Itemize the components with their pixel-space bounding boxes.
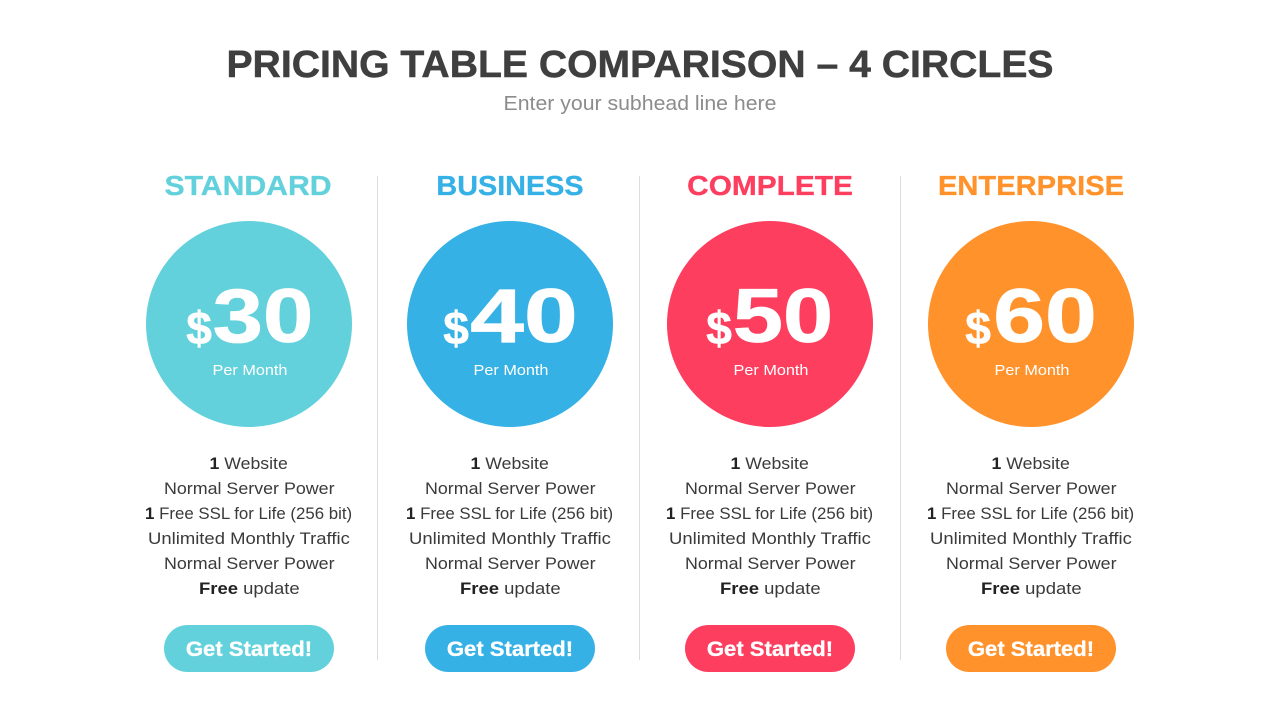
price currency: standard: $: [186, 302, 212, 354]
feature list: business: Unlimited Monthly Traffic: [409, 529, 611, 548]
feature list: enterprise: 1 Website: [992, 454, 1070, 473]
price value: complete: 50: [733, 274, 833, 359]
feature list: enterprise: [927, 454, 1135, 598]
button: complete: [685, 625, 855, 672]
price period: standard: Per Month: [213, 363, 287, 379]
button: business: [425, 625, 595, 672]
feature list: complete: Free update: [720, 579, 820, 598]
price circle: standard: [146, 221, 352, 427]
price period: business: Per Month: [474, 363, 548, 379]
feature list: complete: Normal Server Power: [685, 554, 855, 573]
title: PRICING TABLE COMPARISON – 4 CIRCLES: [226, 44, 1054, 86]
button label: complete: Get Started!: [707, 638, 833, 661]
feature list: business: [406, 454, 614, 598]
feature list: standard: [145, 454, 353, 598]
price value: standard: 30: [212, 274, 313, 359]
price circle: business: [407, 221, 613, 427]
price circle: enterprise: [928, 221, 1134, 427]
heading: standard: STANDARD: [164, 170, 332, 200]
subhead: Enter your subhead line here: [504, 93, 776, 115]
feature list: complete: Normal Server Power: [685, 479, 855, 498]
feature list: business: Normal Server Power: [425, 479, 595, 498]
feature list: complete: Unlimited Monthly Traffic: [669, 529, 871, 548]
feature list: complete: 1 Free SSL for Life (256 bit): [666, 504, 874, 523]
heading: enterprise: ENTERPRISE: [938, 170, 1124, 200]
price period: enterprise: Per Month: [995, 363, 1069, 379]
button: enterprise: [946, 625, 1116, 672]
feature list: enterprise: Normal Server Power: [946, 479, 1116, 498]
price circle: complete: [667, 221, 873, 427]
heading: business: BUSINESS: [436, 170, 584, 200]
price period: complete: Per Month: [734, 363, 808, 379]
price currency: enterprise: $: [965, 302, 991, 354]
button label: enterprise: Get Started!: [968, 638, 1094, 661]
price value: business: 40: [470, 274, 577, 359]
feature list: standard: 1 Free SSL for Life (256 bit): [145, 504, 353, 523]
feature list: business: Free update: [460, 579, 560, 598]
heading: complete: COMPLETE: [687, 170, 853, 200]
feature list: business: 1 Free SSL for Life (256 bit): [406, 504, 614, 523]
price value: enterprise: 60: [993, 274, 1096, 359]
feature list: enterprise: Normal Server Power: [946, 554, 1116, 573]
feature list: enterprise: 1 Free SSL for Life (256 bit): [927, 504, 1135, 523]
button label: standard: Get Started!: [186, 638, 312, 661]
feature list: standard: 1 Website: [210, 454, 288, 473]
price currency: complete: $: [706, 302, 732, 354]
feature list: standard: Normal Server Power: [164, 479, 334, 498]
button: standard: [164, 625, 334, 672]
feature list: standard: Unlimited Monthly Traffic: [148, 529, 350, 548]
feature list: standard: Free update: [199, 579, 299, 598]
feature list: enterprise: Unlimited Monthly Traffic: [930, 529, 1132, 548]
price currency: business: $: [443, 302, 469, 354]
feature list: standard: Normal Server Power: [164, 554, 334, 573]
feature list: complete: 1 Website: [731, 454, 809, 473]
feature list: complete: [666, 454, 874, 598]
button label: business: Get Started!: [447, 638, 573, 661]
feature list: business: 1 Website: [471, 454, 549, 473]
feature list: business: Normal Server Power: [425, 554, 595, 573]
feature list: enterprise: Free update: [981, 579, 1081, 598]
